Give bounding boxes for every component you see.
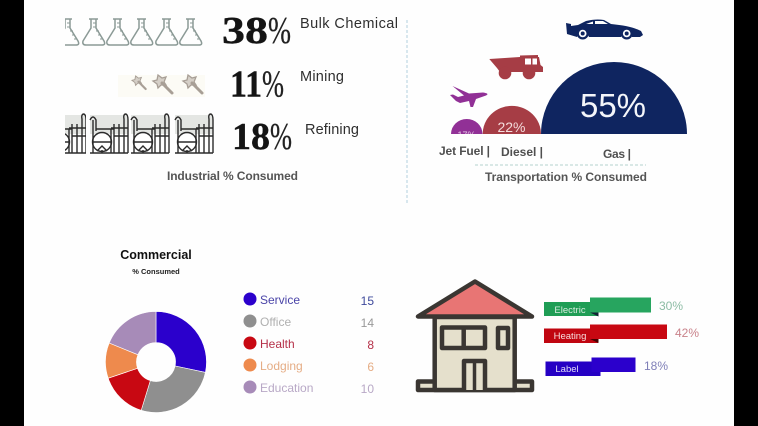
hammer icon row bbox=[118, 75, 205, 97]
bar: electric: 30% bbox=[659, 299, 683, 313]
legend: lodging: 6 bbox=[367, 360, 374, 374]
bar: heating: Heating bbox=[554, 331, 586, 342]
mining label: Mining bbox=[300, 69, 344, 85]
car windows bbox=[586, 21, 608, 24]
bar: heating bbox=[544, 324, 699, 343]
legend: office: Office bbox=[260, 315, 291, 329]
legend: office bbox=[244, 314, 374, 330]
icon: car bbox=[566, 19, 643, 37]
legend: office: 14 bbox=[361, 316, 374, 330]
legend: health bbox=[244, 336, 374, 352]
center divider bbox=[406, 20, 408, 205]
car wheels bbox=[577, 28, 633, 40]
bulk chemical percentage: 38 bbox=[222, 10, 268, 52]
panel: house energy use bbox=[418, 282, 699, 390]
panel: commercial bbox=[106, 248, 374, 413]
flask icon row bbox=[57, 19, 202, 45]
legend: lodging: Lodging bbox=[260, 359, 303, 373]
legend: health: Health bbox=[260, 337, 295, 351]
legend: education: Education bbox=[260, 381, 313, 395]
legend: education: 10 bbox=[361, 382, 374, 396]
refining label: Refining bbox=[305, 122, 359, 138]
bar: electric bbox=[544, 298, 683, 316]
bar: heating: 42% bbox=[675, 326, 699, 340]
gas semicircle bbox=[541, 62, 687, 134]
jet fuel percentage: 17% bbox=[457, 130, 476, 140]
refining percentage: % bbox=[270, 116, 292, 158]
bar: electric: Electric bbox=[554, 305, 586, 316]
commercial heading: Commercial bbox=[120, 248, 192, 262]
diesel percentage: 22% bbox=[497, 119, 526, 135]
mining percentage bbox=[230, 64, 284, 106]
legend: education bbox=[244, 380, 374, 396]
jet fuel label: Jet Fuel | bbox=[439, 144, 490, 158]
panel: industrial bbox=[65, 17, 397, 180]
bar: label: 18% bbox=[644, 359, 668, 373]
transportation caption: Transportation % Consumed bbox=[485, 170, 647, 184]
diesel label: Diesel | bbox=[501, 145, 543, 159]
commercial subheading: % Consumed bbox=[132, 267, 180, 276]
donut chart bbox=[106, 312, 206, 413]
gas label: Gas | bbox=[603, 147, 631, 161]
jet fuel semicircle bbox=[451, 119, 482, 134]
legend: lodging bbox=[244, 358, 374, 374]
icon: truck bbox=[489, 55, 543, 79]
icon: plane bbox=[450, 86, 487, 107]
industrial caption: Industrial % Consumed bbox=[167, 169, 298, 183]
legend: health: 8 bbox=[367, 338, 374, 352]
panel: transportation bbox=[439, 19, 687, 184]
bar: label bbox=[546, 358, 668, 376]
refining percentage bbox=[232, 116, 292, 158]
legend: service: 15 bbox=[361, 294, 374, 308]
bulk chemical label: Bulk Chemical bbox=[300, 16, 398, 32]
legend: service: Service bbox=[260, 293, 300, 307]
bar: label: Label bbox=[555, 364, 579, 375]
bulk chemical percentage: % bbox=[268, 10, 291, 52]
refinery icon row bbox=[48, 114, 213, 153]
icon: house bbox=[418, 282, 532, 390]
refining percentage: 18 bbox=[232, 116, 270, 158]
dashed rule bbox=[475, 164, 646, 166]
diesel semicircle bbox=[483, 106, 541, 134]
gas percentage: 55% bbox=[580, 87, 646, 124]
mining percentage: 11 bbox=[230, 64, 262, 106]
bulk chemical percentage bbox=[222, 10, 291, 52]
mining percentage: % bbox=[262, 64, 284, 106]
legend: service bbox=[244, 292, 374, 308]
